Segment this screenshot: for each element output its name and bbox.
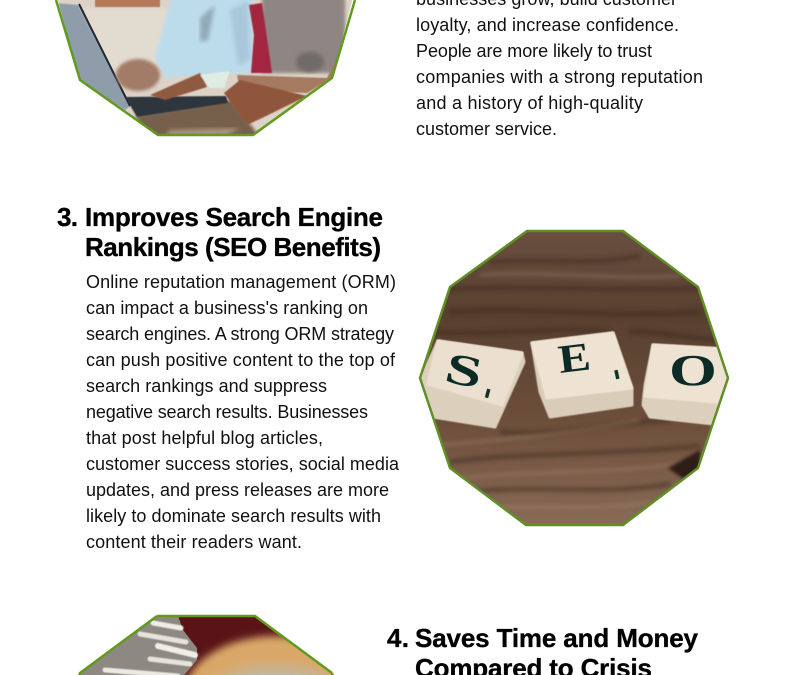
heading: 3. Improves Search Engine Rankings xyxy=(57,202,383,262)
text block: SEO benefits: search rankings and suppress xyxy=(86,376,327,396)
tile E xyxy=(532,333,632,417)
card xyxy=(200,71,230,88)
text block: SEO benefits: updates, and press releases are more xyxy=(86,480,389,500)
photo: hands typing on a laptop xyxy=(50,0,360,140)
text block: SEO benefits: can push positive content to the top of xyxy=(86,350,396,370)
text block: reputation and trust: companies with a strong reputation xyxy=(416,67,703,87)
text block: SEO benefits: can impact a business's ranking on xyxy=(86,298,368,318)
text block: SEO benefits: content their readers want. xyxy=(86,532,302,552)
photo: SEO letter tiles on wood xyxy=(415,225,740,530)
heading: 4. Saves Time and Money: 4. xyxy=(387,623,409,653)
photo: coin stack and large coin xyxy=(78,614,334,675)
text block: SEO benefits: negative search results. Businesses xyxy=(86,402,368,422)
text block: reputation and trust: customer service. xyxy=(416,119,557,139)
heading: 3. Improves Search Engine Rankings: Improves Search Engine xyxy=(85,202,383,232)
tile S xyxy=(418,341,524,427)
text block: SEO benefits: likely to dominate search results with xyxy=(86,506,381,526)
tile S: S xyxy=(441,343,487,399)
text block: SEO benefits: customer success stories, social media xyxy=(86,454,400,474)
text block: SEO benefits: that post helpful blog articles, xyxy=(86,428,323,448)
left hand xyxy=(116,59,160,91)
forearm and right hand xyxy=(236,55,338,94)
shirt xyxy=(155,0,253,78)
text block: SEO benefits: search engines. A strong ORM strategy xyxy=(86,324,394,344)
heading: 4. Saves Time and Money xyxy=(387,623,699,675)
keyboard xyxy=(125,96,228,117)
laptop screen xyxy=(55,3,130,110)
text block: reputation and trust xyxy=(416,0,703,139)
text block: SEO benefits: Online reputation management (ORM) xyxy=(86,272,396,292)
heading: 4. Saves Time and Money: Saves Time and Money xyxy=(415,623,699,653)
tile O xyxy=(643,345,740,427)
heading: 3. Improves Search Engine Rankings: Rankings (SEO Benefits) xyxy=(85,232,381,262)
text block: reputation and trust: People are more likely to trust xyxy=(416,41,652,61)
heading: 3. Improves Search Engine Rankings: 3. xyxy=(57,202,78,232)
tie xyxy=(249,3,272,73)
tile E: E xyxy=(556,334,593,382)
vest xyxy=(262,0,345,73)
text block: reputation and trust: and a history of high-quality xyxy=(416,93,643,113)
text block: SEO benefits xyxy=(86,272,400,552)
text block: reputation and trust: loyalty, and increase confidence. xyxy=(416,15,679,35)
desk xyxy=(134,98,258,134)
tile O: O xyxy=(669,346,717,395)
